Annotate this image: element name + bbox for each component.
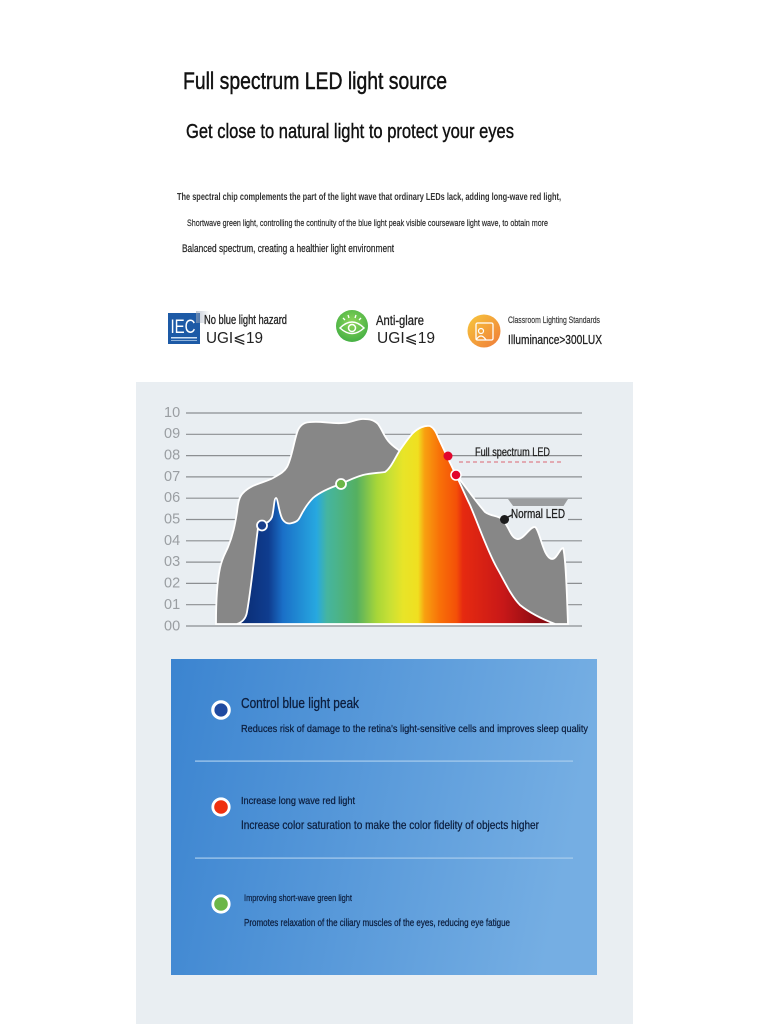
axis labels: 05 bbox=[164, 512, 180, 528]
description text: The spectral chip complements the part of the light wave that ordinary LEDs lack, adding long-wave red light, bbox=[177, 192, 561, 203]
feature: no blue light hazard bbox=[168, 311, 287, 347]
axis labels: 02 bbox=[164, 576, 180, 592]
axis labels: 01 bbox=[164, 597, 180, 613]
axis labels: 06 bbox=[164, 490, 180, 506]
benefit: control blue light peak bbox=[213, 696, 589, 735]
feature: anti-glare: Anti-glare bbox=[376, 313, 424, 328]
title: Full spectrum LED light source bbox=[183, 68, 447, 95]
benefit: improving short-wave green light: Promotes relaxation of the ciliary muscles of the eyes, reducing eye fatigue bbox=[244, 918, 510, 929]
feature: no blue light hazard: UGI⩽19 bbox=[206, 330, 263, 347]
axis labels: 03 bbox=[164, 554, 180, 570]
icon: green eye bbox=[336, 310, 368, 342]
normal LED label: Normal LED bbox=[511, 506, 565, 521]
benefit: improving short-wave green light: Improving short-wave green light bbox=[244, 893, 352, 904]
full spectrum LED label: Full spectrum LED bbox=[475, 445, 550, 459]
feature: classroom lighting standards: Illuminance>300LUX bbox=[508, 332, 602, 347]
panel: chart background bbox=[136, 382, 633, 1024]
description text: Balanced spectrum, creating a healthier light environment bbox=[182, 243, 394, 255]
benefit: increase long wave red light bbox=[213, 795, 539, 832]
chart markers bbox=[257, 452, 509, 530]
description text bbox=[177, 192, 561, 255]
axis labels: 04 bbox=[164, 533, 180, 549]
normal LED curve bbox=[216, 419, 568, 624]
description text: Shortwave green light, controlling the continuity of the blue light peak visible courseware light wave, to obtain more bbox=[187, 218, 548, 229]
feature: classroom lighting standards: Classroom Lighting Standards bbox=[508, 315, 600, 325]
feature: no blue light hazard: No blue light hazard bbox=[204, 313, 287, 327]
icon: IEC logo: IEC bbox=[170, 317, 196, 338]
benefit: improving short-wave green light bbox=[213, 893, 510, 929]
benefit: increase long wave red light: Increase long wave red light bbox=[241, 795, 355, 807]
icon: orange classroom bbox=[468, 314, 500, 348]
full spectrum LED label bbox=[459, 445, 562, 462]
axis labels: 10 bbox=[164, 405, 180, 421]
panel: benefits bbox=[171, 659, 597, 975]
feature: anti-glare: UGI⩽19 bbox=[377, 330, 435, 347]
full spectrum curve bbox=[237, 426, 555, 624]
axis labels: 00 bbox=[164, 618, 180, 634]
benefit: control blue light peak: Control blue light peak bbox=[241, 696, 360, 712]
grid lines bbox=[186, 413, 582, 626]
subtitle: Get close to natural light to protect your eyes bbox=[186, 121, 514, 143]
chart: spectrum comparison bbox=[164, 405, 582, 634]
benefit: control blue light peak: Reduces risk of damage to the retina's light-sensitive cells and improves sleep quality bbox=[241, 723, 589, 735]
normal LED label bbox=[504, 499, 568, 521]
feature: classroom lighting standards bbox=[468, 314, 602, 348]
benefit: increase long wave red light: Increase color saturation to make the color fidelity of objects higher bbox=[241, 818, 539, 832]
axis labels bbox=[164, 405, 180, 634]
axis labels: 09 bbox=[164, 426, 180, 442]
feature: anti-glare bbox=[336, 310, 435, 347]
axis labels: 07 bbox=[164, 469, 180, 485]
axis labels: 08 bbox=[164, 448, 180, 464]
